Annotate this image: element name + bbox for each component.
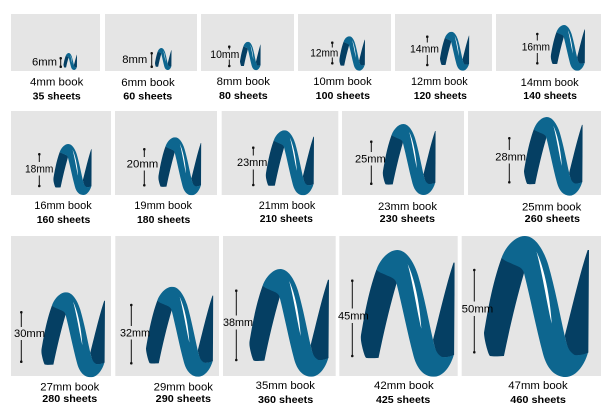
panel: 25mm book — [468, 111, 601, 225]
arrow: 12mm height — [331, 43, 333, 63]
book size: 4mm book — [30, 76, 84, 88]
sheet count: 80 sheets — [219, 90, 268, 102]
sheet count: 425 sheets — [376, 394, 430, 406]
height label: 20mm — [127, 158, 158, 170]
sheet count: 35 sheets — [33, 90, 81, 102]
arrow: 32mm height — [130, 305, 132, 363]
book size: 35mm book — [256, 380, 316, 392]
panel: 16mm book — [11, 111, 111, 226]
arrow: 16mm height — [536, 34, 538, 63]
height label: 25mm — [355, 153, 386, 165]
panel: 27mm book — [11, 236, 111, 405]
icon: 21mm binding — [266, 130, 314, 195]
icon: 47mm binding — [484, 236, 589, 377]
height label: 16mm — [522, 41, 550, 53]
arrow: 25mm height — [370, 142, 372, 184]
sheet count: 460 sheets — [510, 394, 566, 406]
sheet count: 280 sheets — [42, 393, 97, 405]
icon: 12mm binding — [440, 32, 469, 71]
book size: 8mm book — [217, 76, 271, 88]
book size: 19mm book — [134, 200, 192, 212]
icon: 25mm binding — [524, 117, 583, 196]
arrow: 18mm height — [38, 154, 40, 186]
sheet count: 230 sheets — [380, 213, 435, 225]
sheet count: 160 sheets — [37, 214, 90, 226]
book size: 23mm book — [378, 201, 437, 213]
panel: 19mm book — [115, 111, 217, 226]
sheet count: 360 sheets — [258, 394, 313, 406]
icon: 19mm binding — [158, 137, 201, 195]
arrow: 45mm height — [351, 281, 353, 356]
arrow: 20mm height — [143, 149, 145, 185]
height label: 14mm — [410, 43, 439, 55]
icon: 42mm binding — [361, 250, 455, 377]
height label: 8mm — [122, 54, 147, 66]
book size: 42mm book — [374, 380, 434, 392]
book size: 16mm book — [34, 200, 92, 212]
icon: 16mm binding — [53, 144, 92, 195]
icon: 6mm binding — [155, 48, 172, 70]
book size: 21mm book — [259, 200, 316, 212]
sheet count: 140 sheets — [523, 90, 577, 102]
height label: 18mm — [25, 163, 53, 175]
height label: 23mm — [237, 157, 267, 169]
height label: 10mm — [210, 49, 239, 61]
book size: 6mm book — [121, 77, 175, 89]
sheet count: 180 sheets — [137, 214, 190, 226]
panel: 21mm book — [222, 111, 338, 225]
arrow: 14mm height — [426, 37, 428, 65]
panel: 35mm book — [223, 236, 336, 406]
arrow: 8mm height — [151, 53, 153, 67]
icon: 27mm binding — [41, 292, 105, 377]
height label: 30mm — [14, 328, 45, 340]
panel: 8mm book — [201, 14, 294, 102]
height label: 32mm — [120, 327, 150, 339]
icon: 23mm binding — [383, 124, 436, 195]
arrow: 10mm height — [228, 47, 230, 66]
icon: 35mm binding — [249, 269, 329, 377]
book size: 25mm book — [522, 201, 582, 213]
icon: 14mm binding — [551, 25, 585, 71]
sheet count: 100 sheets — [316, 90, 370, 102]
height label: 45mm — [338, 310, 369, 322]
arrow: 30mm height — [20, 312, 22, 362]
panel: 14mm book — [496, 14, 601, 102]
book size: 10mm book — [313, 76, 372, 88]
panel: 12mm book — [395, 14, 492, 102]
arrow: 50mm height — [473, 270, 475, 352]
height label: 50mm — [462, 303, 493, 315]
panel: 23mm book — [342, 111, 464, 225]
icon: 8mm binding — [240, 42, 261, 70]
book size: 14mm book — [521, 77, 579, 89]
height label: 12mm — [310, 47, 338, 59]
book size: 27mm book — [40, 381, 100, 393]
book size: 12mm book — [411, 76, 468, 88]
panel: 6mm book — [105, 14, 197, 102]
panel: 47mm book — [462, 236, 601, 406]
height label: 28mm — [495, 151, 526, 163]
icon: 4mm binding — [64, 53, 77, 70]
sheet count: 210 sheets — [260, 213, 313, 225]
sheet count: 120 sheets — [414, 90, 467, 102]
icon: 29mm binding — [146, 287, 213, 377]
arrow: 38mm height — [235, 291, 237, 360]
book size: 29mm book — [154, 381, 214, 393]
height label: 6mm — [32, 56, 57, 68]
panel: 4mm book — [11, 14, 100, 102]
arrow: 6mm height — [60, 58, 62, 67]
panel: 42mm book — [338, 236, 458, 406]
panel: 29mm book — [115, 236, 219, 405]
arrow: 23mm height — [252, 148, 254, 185]
sheet count: 60 sheets — [123, 90, 172, 102]
sheet count: 260 sheets — [525, 213, 580, 225]
panel: 10mm book — [298, 14, 391, 102]
sheet count: 290 sheets — [156, 393, 211, 405]
icon: 10mm binding — [339, 36, 365, 71]
arrow: 28mm height — [508, 138, 510, 182]
height label: 38mm — [223, 317, 253, 329]
book size: 47mm book — [508, 380, 568, 392]
